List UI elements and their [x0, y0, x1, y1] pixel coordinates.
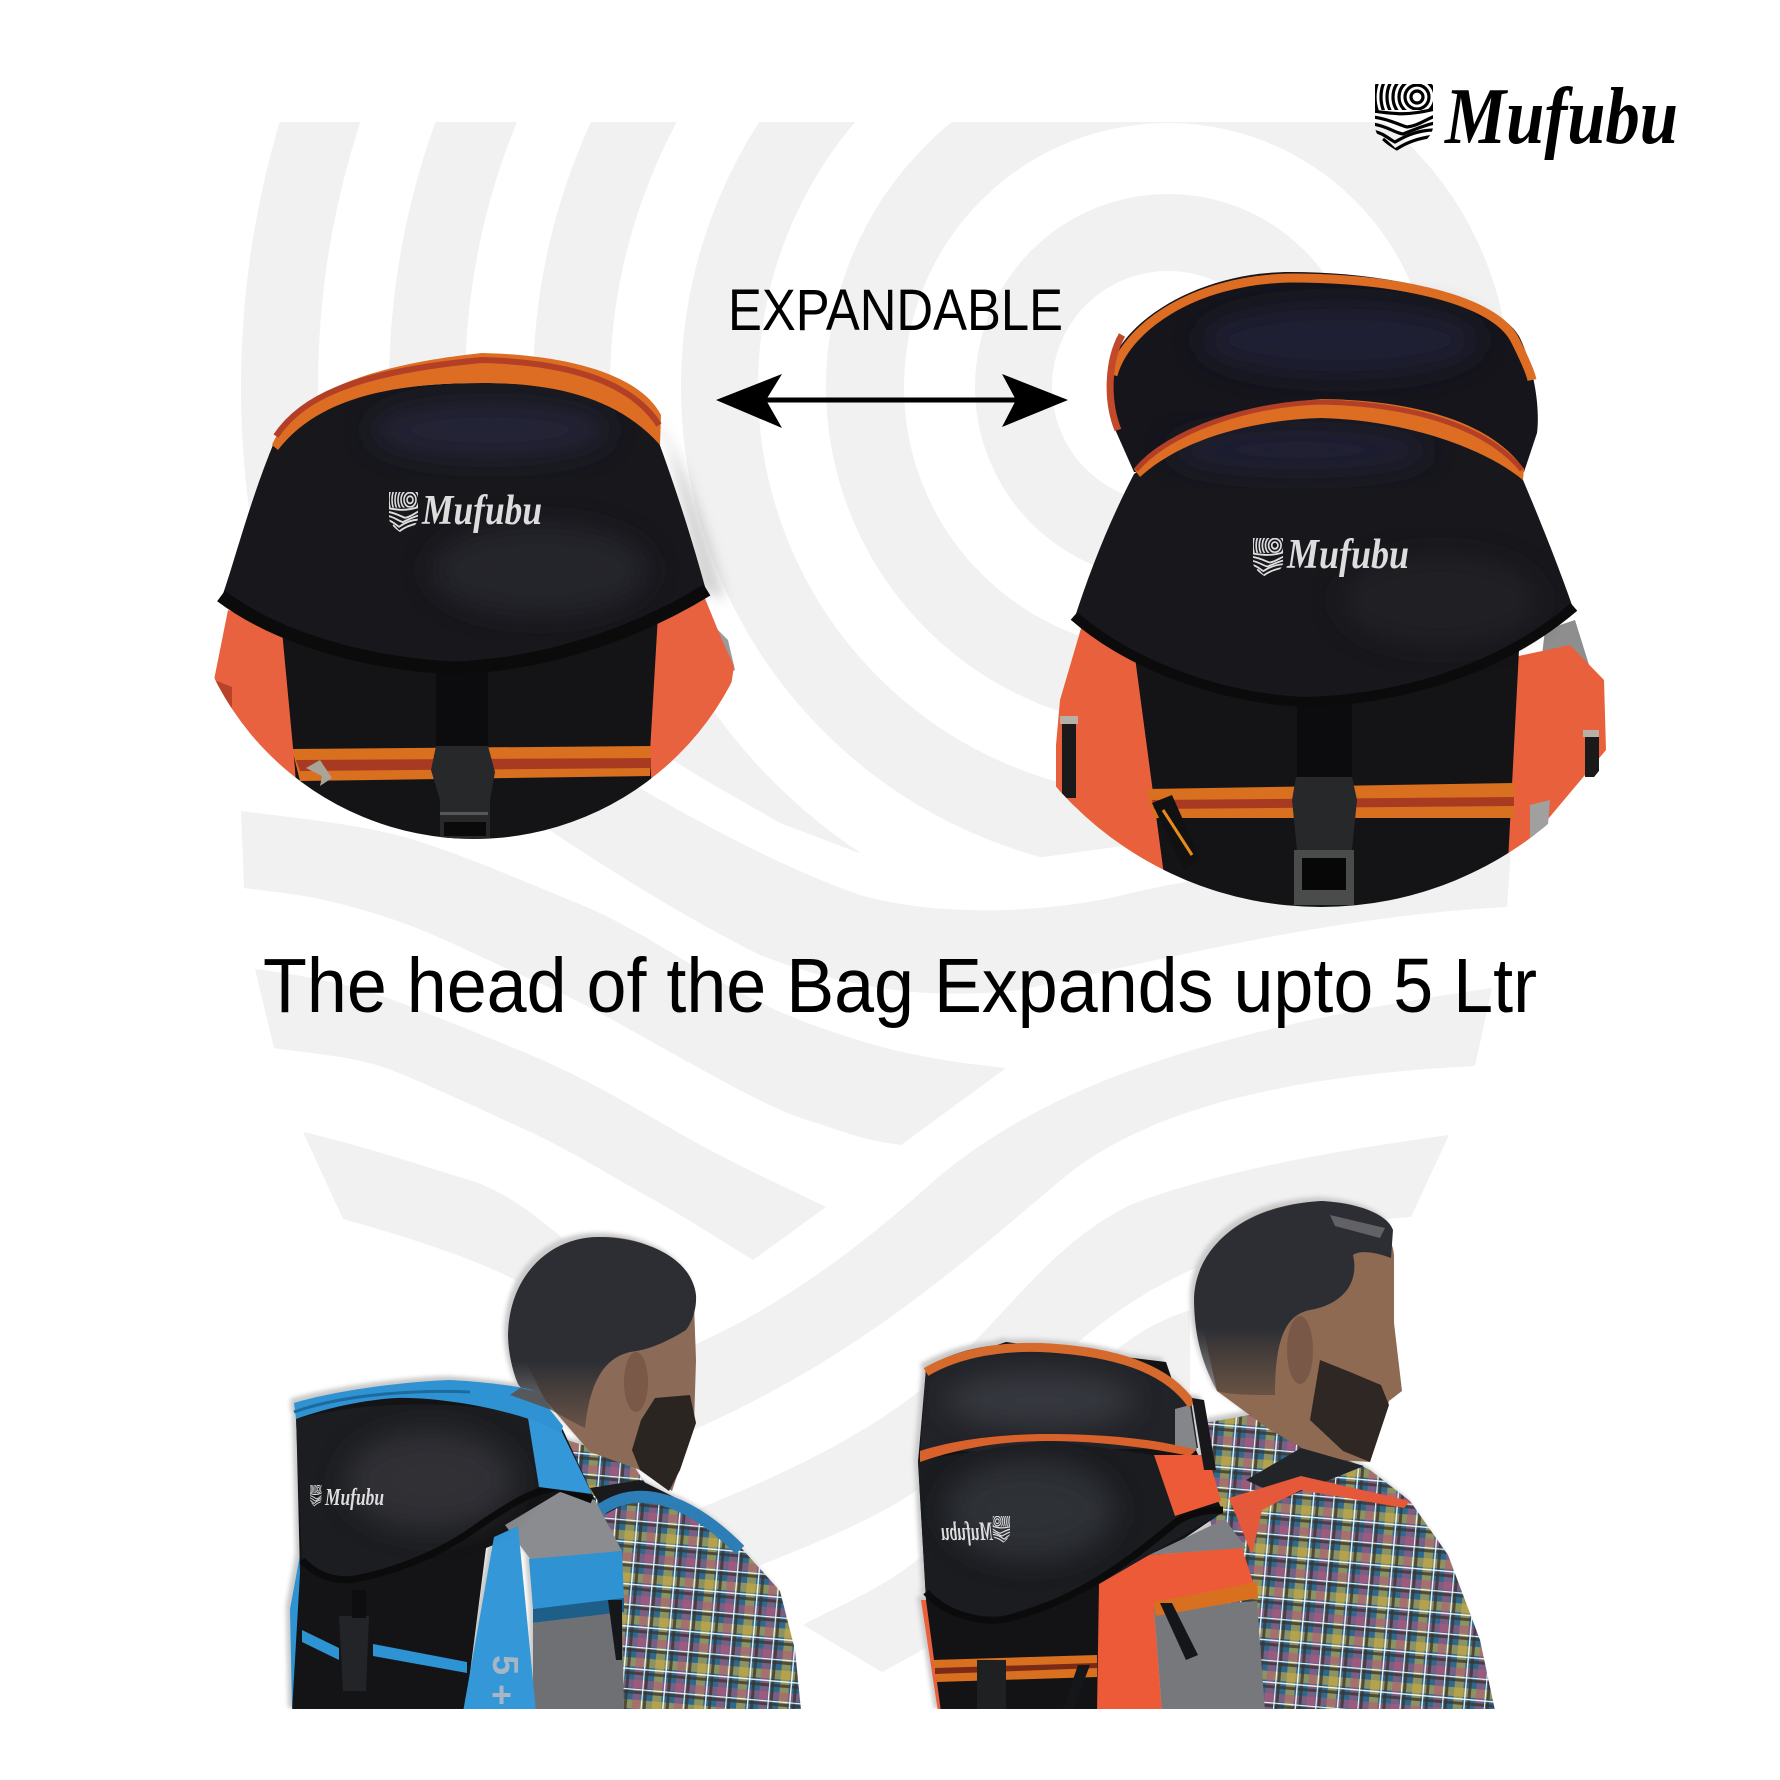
embroidered logo — [388, 475, 542, 534]
arrow: double-headed — [716, 374, 1068, 428]
logo wordmark: Mufubu — [1443, 73, 1678, 161]
flap — [918, 1440, 1223, 1623]
embroidered logo mirrored: Mufubu — [941, 1517, 994, 1546]
blue rim — [294, 1380, 563, 1434]
shoulder strap — [590, 1480, 740, 1550]
blue side panel — [527, 1412, 592, 1494]
embroidered logo — [1252, 521, 1409, 578]
front zipper — [933, 1655, 1097, 1682]
buckle — [339, 1616, 369, 1691]
side pullers — [1060, 716, 1599, 798]
watermark: logo background pattern — [241, 122, 1511, 1672]
panel: man wearing bag expanded — [918, 1201, 1497, 1720]
shoulder strap — [1229, 1448, 1410, 1555]
strip print: 5 — [485, 1655, 526, 1675]
label: expandable: EXPANDABLE — [728, 278, 1063, 343]
zipper — [292, 746, 651, 786]
shirt — [1204, 1409, 1497, 1720]
embroidered logo: Mufubu — [1286, 532, 1409, 578]
flap — [296, 1404, 539, 1584]
panel: man wearing bag closed — [290, 1237, 802, 1720]
orange rim zip — [272, 353, 661, 450]
expanded bag photo illustration — [1056, 272, 1606, 920]
heading: main caption: The head of the Bag Expands upto 5 Ltr — [263, 943, 1537, 1029]
zipper — [1147, 783, 1514, 856]
backpack — [918, 1342, 1265, 1712]
wave bands — [241, 740, 1511, 1672]
front zipper — [302, 1630, 339, 1660]
embroidered logo — [310, 1485, 384, 1510]
neck and head — [508, 1237, 696, 1491]
mid zip — [1134, 399, 1524, 480]
soft shadow — [650, 410, 725, 600]
strip print: + — [491, 1674, 512, 1715]
icon: shield logo — [1373, 55, 1459, 150]
flap — [223, 383, 706, 624]
backpack — [290, 1380, 624, 1715]
concentric rings — [241, 122, 1503, 857]
flap — [1076, 472, 1572, 651]
infographic canvas — [214, 84, 1676, 1709]
strap and buckle — [431, 746, 495, 839]
panel: bag head closed — [214, 353, 735, 860]
orange side panel — [1154, 1455, 1221, 1516]
embroidered logo: Mufubu — [324, 1485, 384, 1511]
grey text patch — [1530, 800, 1550, 838]
closed bag photo illustration — [214, 353, 735, 860]
neck and head — [1194, 1201, 1402, 1462]
top expanded section — [1108, 272, 1538, 472]
embroidered logo mirrored — [941, 1504, 1011, 1546]
embroidered logo: Mufubu — [421, 488, 542, 534]
strap and buckle — [1292, 777, 1357, 905]
strip print — [492, 1656, 518, 1704]
top section — [920, 1343, 1198, 1452]
mid zip — [920, 1434, 1196, 1462]
panel: bag head expanded — [1056, 272, 1606, 920]
side zipper pull — [608, 1600, 622, 1660]
shirt — [560, 1438, 802, 1720]
pocket puller — [1160, 1603, 1198, 1660]
logo: Mufubu brand mark — [1373, 55, 1678, 161]
